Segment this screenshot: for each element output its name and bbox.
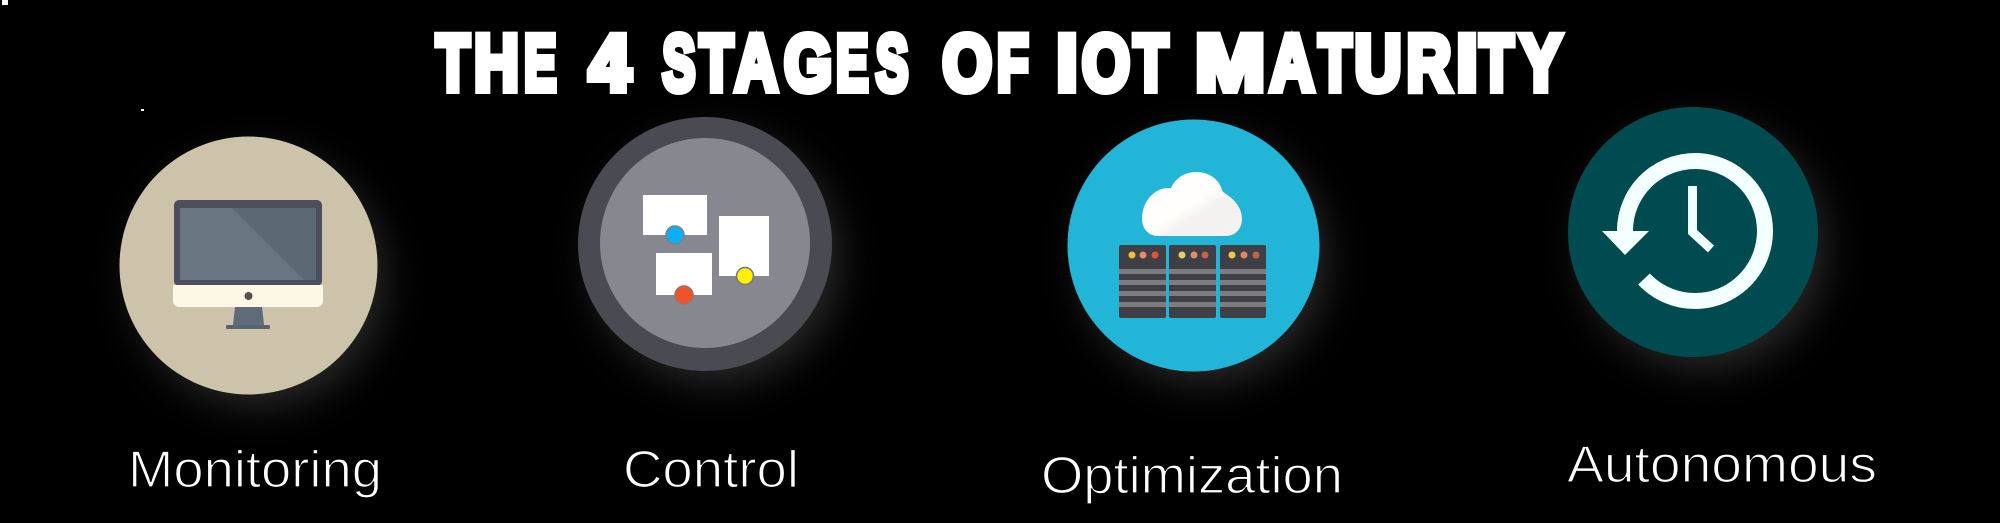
title: S bbox=[876, 18, 908, 107]
title: T bbox=[436, 18, 470, 107]
title: T bbox=[1319, 18, 1351, 107]
title: I bbox=[1457, 18, 1477, 107]
title: E bbox=[524, 18, 556, 107]
title: T bbox=[1134, 18, 1168, 107]
icon: monitor bbox=[120, 136, 378, 394]
title: A bbox=[735, 18, 778, 107]
title: G bbox=[784, 18, 832, 107]
title: M bbox=[1195, 18, 1265, 107]
panel: autonomous bbox=[1567, 107, 1877, 494]
label: Control: Control bbox=[623, 441, 799, 499]
title: E bbox=[836, 18, 868, 107]
title: O bbox=[943, 18, 992, 107]
label: Monitoring: Monitoring bbox=[128, 441, 382, 499]
title: I bbox=[1057, 18, 1077, 107]
title: A bbox=[1270, 18, 1314, 107]
title: T bbox=[700, 18, 733, 107]
icon: clock with arrow bbox=[1568, 107, 1818, 357]
title: 4 bbox=[589, 18, 631, 107]
panel: control bbox=[578, 117, 839, 499]
title: U bbox=[1355, 18, 1401, 107]
title: R bbox=[1407, 18, 1451, 107]
title bbox=[436, 18, 1561, 107]
title: Y bbox=[1520, 18, 1561, 107]
panel: optimization bbox=[1041, 120, 1343, 505]
panel: monitoring bbox=[120, 136, 384, 499]
title: T bbox=[1480, 18, 1513, 107]
label: Autonomous: Autonomous bbox=[1567, 436, 1877, 494]
icon: sticky notes bbox=[578, 117, 832, 371]
title: O bbox=[1082, 18, 1130, 107]
title: H bbox=[474, 18, 519, 107]
title: S bbox=[662, 18, 695, 107]
icon: cloud and servers bbox=[1068, 120, 1320, 372]
title: F bbox=[997, 18, 1028, 107]
label: Optimization: Optimization bbox=[1041, 447, 1343, 505]
